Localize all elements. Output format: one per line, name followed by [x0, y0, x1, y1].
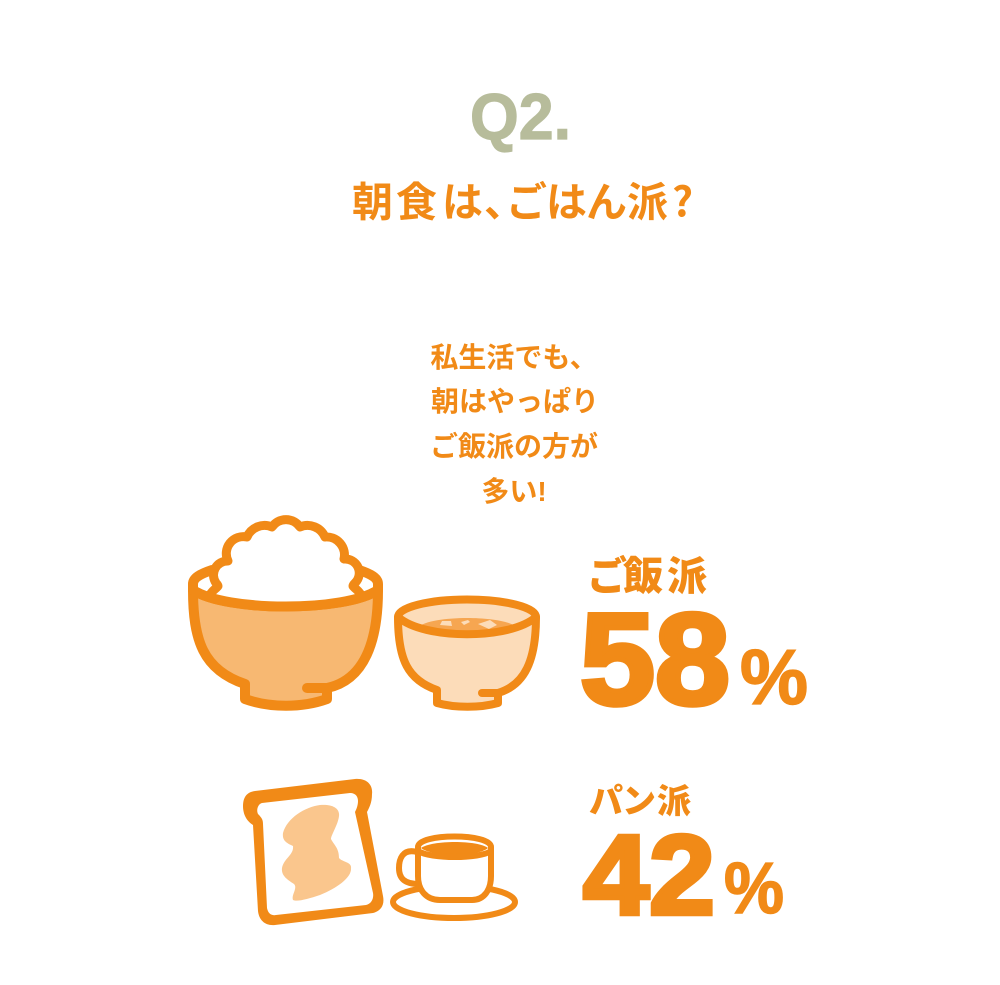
toast spread [282, 805, 351, 901]
percent sign: bread: % [724, 849, 784, 929]
title: 朝食は、ごはん派? [352, 168, 693, 228]
description text: 朝はやっぱり [431, 386, 599, 417]
description text: 多い! [481, 476, 547, 507]
value: rice 58: 58 [580, 586, 730, 732]
label: rice: ご飯派 [587, 544, 707, 602]
description text: ご飯派の方が [430, 430, 598, 462]
icon: miso soup bowl [398, 600, 536, 707]
question number: Q2. [470, 80, 571, 153]
description text: 私生活でも、 [430, 342, 598, 373]
icon: coffee cup on saucer [393, 836, 515, 918]
icon: rice bowl [193, 520, 378, 706]
percent sign: rice: % [740, 633, 808, 721]
icon: toast [243, 779, 383, 925]
description text [430, 342, 599, 507]
value: bread 42: 42 [583, 812, 715, 938]
label: bread: パン派 [589, 774, 691, 823]
